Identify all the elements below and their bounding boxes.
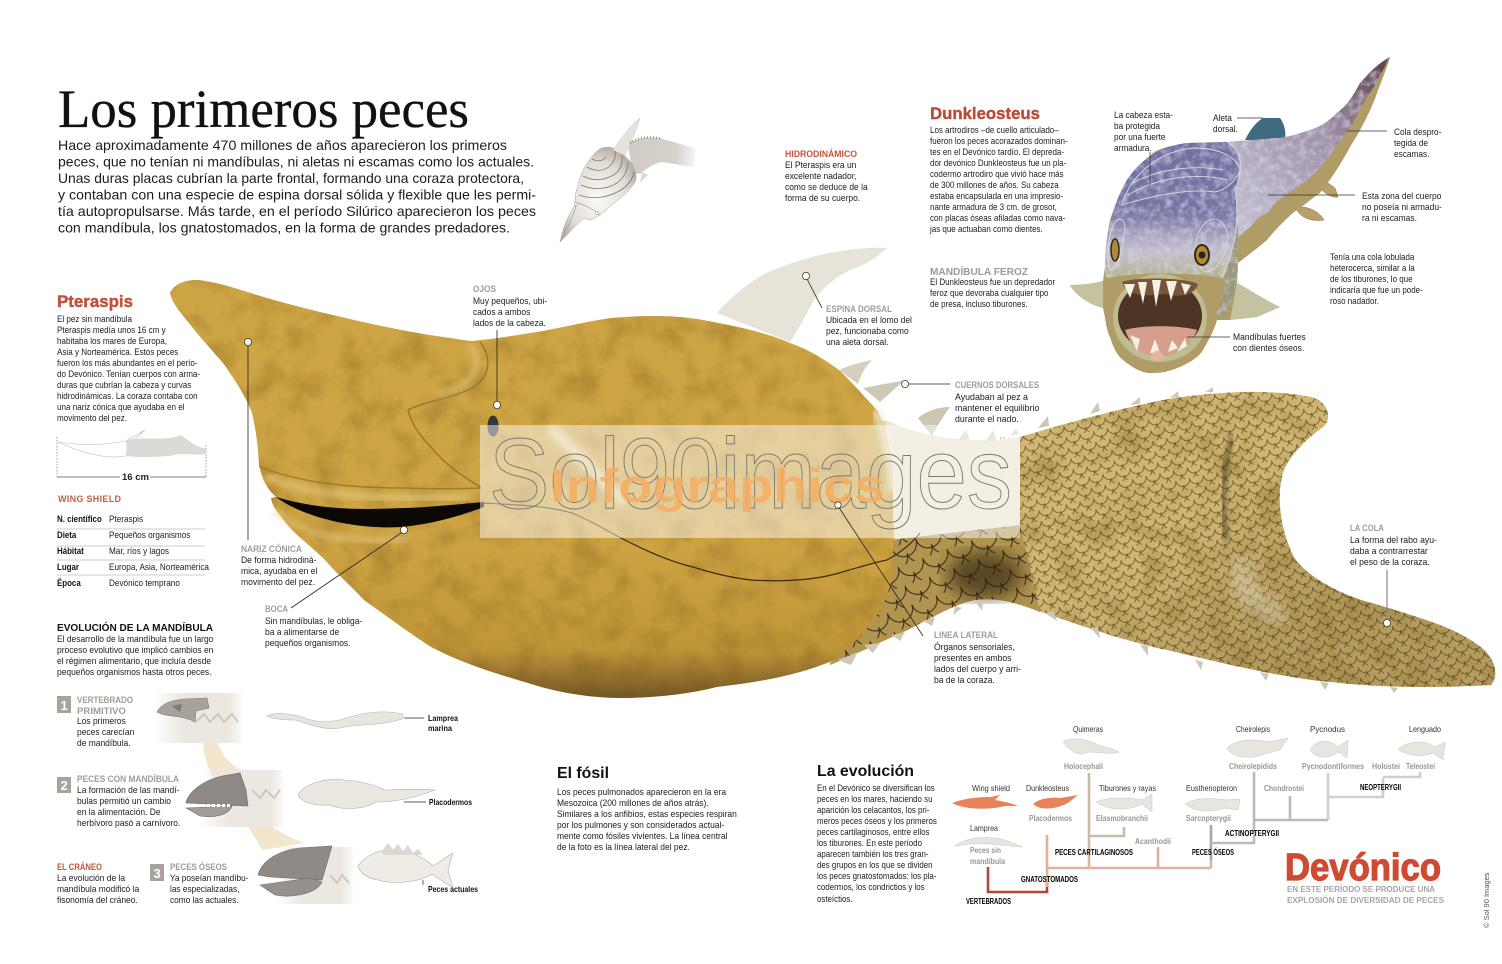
- annotations: Dunkleosteus: Cola despro-: [1394, 127, 1441, 137]
- fish silhouettes: [955, 738, 1445, 847]
- panel: evolución de la mandíbula: [57, 621, 478, 905]
- clade names: Cheirolepidids: [1229, 761, 1277, 771]
- panel: el fósil: El fósil: [557, 765, 609, 782]
- callout: la cola: daba a contrarrestar: [1350, 546, 1428, 556]
- panel: la evolución: los tiburones. En este período: [817, 837, 922, 848]
- species names: Eusthenopteron: [1186, 783, 1237, 793]
- panel: la evolución: En el Devónico se diversifican los: [817, 782, 935, 793]
- species names: Quimeras: [1073, 724, 1103, 734]
- title: Los primeros peces: [58, 79, 469, 139]
- callout: línea lateral: presentes en ambos: [934, 653, 1012, 663]
- callout: la cola: el peso de la coraza.: [1350, 557, 1430, 567]
- panel: Dunkleosteus text: estaba encapsulada en una impresio-: [930, 190, 1063, 201]
- edge spines: [838, 387, 1398, 693]
- group names: PECES ÓSEOS: [1192, 848, 1234, 857]
- cheek plate: [1207, 218, 1238, 318]
- callout: nariz cónica: movimento del pez.: [241, 577, 315, 587]
- annotations: Dunkleosteus: [1114, 110, 1442, 353]
- callout: hidrodinámico: El Pteraspis era un: [785, 160, 856, 170]
- Dunkleosteus leader lines: [1150, 118, 1387, 337]
- panel: Dunkleosteus text: de presa, incluso tiburones.: [930, 298, 1028, 309]
- back skin: [1222, 57, 1390, 260]
- callout: cuernos dorsales: durante el nado.: [955, 414, 1019, 424]
- callout: nariz cónica: NARIZ CÓNICA: [241, 543, 302, 554]
- lamprea: Lamprea: [428, 714, 458, 723]
- panel: la evolución: peces cartilaginosos, entre ellos: [817, 826, 929, 837]
- panel: Dunkleosteus text: con placas óseas afiladas como nava-: [930, 212, 1065, 223]
- panel: Dunkleosteus text: Los artrodiros –de cuello articulado–: [930, 124, 1059, 135]
- mouth: [1113, 274, 1207, 362]
- annotations: Dunkleosteus: ba protegida: [1114, 121, 1160, 131]
- species names: Lamprea: [970, 823, 998, 833]
- Devónico label: Devónico: [1285, 847, 1441, 889]
- clade names: Holostei: [1372, 761, 1400, 771]
- description: do Devónico. Tenían cuerpos con arma-: [57, 368, 200, 379]
- step 1: de mandíbula.: [77, 738, 131, 748]
- annotations: Dunkleosteus: tegida de: [1394, 138, 1428, 148]
- callout: espina dorsal: ESPINA DORSAL: [826, 304, 892, 314]
- description: fueron los más abundantes en el perío-: [57, 357, 198, 368]
- wing shield table: Pteraspis: [109, 514, 144, 524]
- wing shield table: Época: [57, 577, 81, 588]
- step 1: peces carecían: [77, 727, 134, 737]
- panel: Dunkleosteus text: feroz que devoraba cualquier tipo: [930, 287, 1049, 298]
- panel: Dunkleosteus text: codermo artrodiro que vivió hace más: [930, 168, 1064, 179]
- el cráneo: fisonomía del cráneo.: [57, 895, 138, 905]
- panel: la evolución: [817, 763, 937, 904]
- callout: boca: BOCA: [265, 604, 288, 614]
- description: habitaba los mares de Europa,: [57, 335, 167, 346]
- annotations: Dunkleosteus: con dientes óseos.: [1233, 343, 1304, 353]
- tree branches: [988, 772, 1420, 892]
- watermark: Sol90images: [489, 418, 1012, 530]
- panel: la evolución: La evolución: [817, 763, 914, 780]
- Devónico label: EN ESTE PERÍODO SE PRODUCE UNA: [1287, 884, 1435, 894]
- callout: la cola: [1350, 523, 1437, 567]
- panel: Dunkleosteus text: jas que actuaban como dientes.: [929, 223, 1043, 234]
- callout: espina dorsal: [826, 304, 912, 347]
- panel: el fósil: por los pulmones y son considerados actual-: [557, 820, 724, 830]
- illustration: small Pteraspis: [560, 118, 695, 242]
- panel: el fósil: Mesozoica (200 millones de años atrás).: [557, 798, 709, 808]
- step 3: Ya poseían mandíbu-: [170, 873, 249, 883]
- annotations: Dunkleosteus: de los tiburones, lo que: [1330, 273, 1413, 284]
- annotations: Dunkleosteus: Mandíbulas fuertes: [1233, 332, 1306, 342]
- dorsal fin: [1245, 118, 1285, 140]
- step 2: La formación de las mandí-: [77, 785, 179, 795]
- el cráneo: mandíbula modificó la: [57, 884, 139, 894]
- callout: boca: pequeños organismos.: [265, 638, 350, 648]
- eye: [488, 416, 498, 436]
- dorsal spine: [717, 248, 950, 436]
- panel: la evolución: aparecen también los tres gran-: [817, 848, 929, 859]
- panel: Pteraspis facts: [57, 292, 209, 588]
- wing shield table: [57, 494, 209, 588]
- callout: boca: Sin mandíbulas, le obliga-: [265, 616, 362, 626]
- species names: Lenguado: [1409, 724, 1441, 734]
- step 2: PECES CON MANDÍBULA: [77, 773, 179, 784]
- callout: espina dorsal: una aleta dorsal.: [826, 337, 888, 347]
- clade names: Teleostei: [1406, 761, 1435, 771]
- watermark: Infographics: [550, 459, 885, 512]
- intro: el régimen alimentario, que incluía desde: [57, 656, 211, 666]
- panel: la evolución: des grupos en los que se dividen: [817, 859, 933, 870]
- placodermos fish: Placodermos: [429, 798, 472, 807]
- wing shield table: Mar, ríos y lagos: [109, 546, 170, 556]
- intro text block: Hace aproximadamente 470 millones de años aparecieron los primeros: [58, 137, 507, 153]
- panel: Dunkleosteus text: de 300 millones de años. Su cabeza: [930, 179, 1059, 190]
- panel: Dunkleosteus text: MANDÍBULA FEROZ: [930, 265, 1029, 278]
- wing shield table: Europa, Asia, Norteamérica: [109, 562, 209, 572]
- clade names: Acanthodii: [1135, 836, 1171, 846]
- credit: © Sol 90 Images: [1482, 872, 1491, 928]
- panel: Dunkleosteus text: El Dunkleosteus fue un depredador: [930, 276, 1055, 287]
- el cráneo: La evolución de la: [57, 873, 125, 883]
- species names: Tiburones y rayas: [1099, 783, 1156, 793]
- step 3: como las actuales.: [170, 895, 239, 905]
- intro text block: tía autopropulsarse. Más tarde, en el período Silúrico aparecieron los peces: [58, 203, 536, 219]
- callout: línea lateral: Órganos sensoriales,: [934, 642, 1015, 652]
- step 3: PECES ÓSEOS: [170, 861, 227, 872]
- callout: la cola: LA COLA: [1350, 523, 1384, 533]
- intro text block: Unas duras placas cubrían la parte frontal, formando una coraza protectora,: [58, 170, 524, 186]
- step 1: VERTEBRADO: [77, 695, 133, 705]
- panel: el fósil: mente como fósiles vivientes. La línea central: [557, 831, 727, 841]
- description: duras que cubrían la cabeza y curvas: [57, 379, 192, 390]
- description: hidrodinámicas. La coraza contaba con: [57, 390, 198, 401]
- callout: hidrodinámico: excelente nadador,: [785, 171, 856, 181]
- panel: main Pteraspis illustration: [170, 248, 1495, 698]
- description: movimento del pez.: [57, 412, 127, 423]
- step 3: las especializadas,: [170, 884, 239, 894]
- wing shield table: Devónico temprano: [109, 578, 180, 588]
- callout lines and dots: [244, 272, 1391, 636]
- carapace: [170, 280, 893, 698]
- callout: espina dorsal: Ubicada en el lomo del: [826, 315, 912, 325]
- wing shield table: Lugar: [57, 561, 80, 572]
- species names: Pycnodus: [1310, 724, 1345, 734]
- callout: nariz cónica: De forma hidrodiná-: [241, 555, 317, 565]
- panel: la evolución: aparición los celacantos, los pri-: [817, 804, 930, 815]
- description: [57, 313, 200, 423]
- panel: Dunkleosteus text: tes en el Devónico tardío. El depreda-: [930, 146, 1064, 157]
- panel: el fósil: [557, 765, 737, 852]
- Devónico label: [1285, 847, 1444, 905]
- wing shield table: Dieta: [57, 529, 77, 540]
- size diagram: 16 cm: [122, 472, 149, 483]
- callout: línea lateral: [934, 630, 1021, 685]
- group names: GNATOSTOMADOS: [1021, 875, 1079, 884]
- panel: Dunkleosteus text: nante armadura de 3 cm. de grosor,: [930, 201, 1057, 212]
- callout: ojos: lados de la cabeza.: [473, 318, 546, 328]
- panel: la evolución: los peces gnatostomados: los pla-: [817, 870, 937, 881]
- clade names: Elasmobranchii: [1096, 813, 1148, 823]
- illustration: Dunkleosteus: [1070, 57, 1390, 373]
- annotations: Dunkleosteus: no poseía ni armadu-: [1362, 202, 1442, 212]
- group names: NEOPTERYGII: [1360, 783, 1401, 792]
- el cráneo: [57, 861, 139, 905]
- callout: hidrodinámico: forma de su cuerpo.: [785, 193, 860, 203]
- panel: el fósil: de la foto es la línea lateral del pez.: [557, 842, 690, 852]
- lamprea: [267, 712, 458, 733]
- intro text block: con mandíbula, los gnatostomados, en la forma de grandes predadores.: [58, 220, 510, 236]
- callout: cuernos dorsales: Ayudaban al pez a: [955, 392, 1029, 402]
- lamprea: marina: [428, 724, 452, 733]
- panel: la evolución: osteíctios.: [817, 893, 853, 904]
- intro text block: peces, que no tenían ni mandíbulas, ni aletas ni escamas como los actuales.: [58, 154, 534, 170]
- annotations: Dunkleosteus: Tenía una cola lobulada: [1330, 251, 1414, 262]
- step 1: Los primeros: [77, 716, 126, 726]
- annotations: Dunkleosteus: heterocerca, similar a la: [1330, 262, 1415, 273]
- body outline: [1070, 57, 1390, 373]
- panel: Dunkleosteus text: Dunkleosteus: [930, 104, 1040, 123]
- annotations: Dunkleosteus: ra ni escamas.: [1362, 213, 1417, 223]
- clade names: Peces sin: [970, 845, 1001, 855]
- step 2: herbívoro pasó a carnívoro.: [77, 818, 180, 828]
- Devónico label: EXPLOSIÓN DE DIVERSIDAD DE PECES: [1287, 894, 1444, 905]
- head armour: [1105, 142, 1240, 278]
- heading: Pteraspis: [57, 292, 133, 311]
- annotations: Dunkleosteus: La cabeza esta-: [1114, 110, 1173, 120]
- wing shield table: Pequeños organismos: [109, 530, 191, 540]
- callout: línea lateral: ba de la coraza.: [934, 675, 995, 685]
- callout: hidrodinámico: como se deduce de la: [785, 182, 868, 192]
- clade names: Holocephali: [1064, 761, 1103, 771]
- description: una nariz cónica que ayudaba en el: [57, 401, 185, 412]
- placodermos fish: [298, 780, 472, 808]
- annotations: Dunkleosteus: Esta zona del cuerpo: [1362, 191, 1441, 201]
- species names: Cheirolepis: [1236, 724, 1270, 734]
- description: Pteraspis medía unos 16 cm y: [57, 324, 166, 335]
- annotations: Dunkleosteus: escamas.: [1394, 149, 1429, 159]
- orange highlighted fish: [952, 795, 1078, 809]
- panel: Dunkleosteus text: dor devónico Dunkleosteus fue un pla-: [930, 157, 1066, 168]
- panel: la evolución: peces en los mares, haciendo su: [817, 793, 933, 804]
- callout: hidrodinámico: [785, 148, 868, 203]
- heading: EVOLUCIÓN DE LA MANDÍBULA: [57, 621, 213, 634]
- callout: cuernos dorsales: [955, 380, 1039, 424]
- chart: evolutionary tree: [952, 724, 1445, 906]
- peces actuales fish: Peces actuales: [428, 885, 478, 894]
- arrow band: [203, 743, 305, 850]
- panel: Dunkleosteus text: fueron los peces acorazados dominan-: [930, 135, 1068, 146]
- skull 3: [258, 846, 353, 904]
- step 1: 1: [60, 698, 68, 713]
- step 2: 2: [60, 778, 68, 793]
- intro: El desarrollo de la mandíbula fue un largo: [57, 634, 213, 644]
- clade names: Chondrostei: [1264, 783, 1304, 793]
- intro: pequeños organismos hasta otros peces.: [57, 667, 212, 677]
- callout: nariz cónica: mica, ayudaba en el: [241, 566, 317, 576]
- wing shield table: WING SHIELD: [58, 494, 121, 504]
- intro: proceso evolutivo que implicó cambios en: [57, 645, 213, 655]
- step 2: bulas permitió un cambio: [77, 796, 171, 806]
- description: El pez sin mandíbula: [57, 313, 132, 324]
- callout: boca: [265, 604, 362, 648]
- species names: Dunkleosteus: [1026, 783, 1069, 793]
- panel: Dunkleosteus text: [929, 104, 1068, 309]
- step 3: 3: [154, 866, 161, 881]
- clade names: Sarcopterygii: [1186, 813, 1231, 823]
- callout: ojos: OJOS: [473, 284, 496, 294]
- wing shield table: N. científico: [57, 513, 102, 524]
- annotations: Dunkleosteus: Aleta: [1213, 113, 1232, 123]
- step 1: PRIMITIVO: [77, 706, 126, 716]
- carapace plate seams and lips: [259, 342, 920, 581]
- clade names: Pycnodontiformes: [1302, 761, 1364, 771]
- callout: línea lateral: LINEA LATERAL: [934, 630, 998, 640]
- callout: ojos: cados a ambos: [473, 307, 531, 317]
- mouth: [276, 497, 484, 527]
- peces actuales fish: [358, 843, 478, 894]
- intro text block: y contaban con una especie de espina dorsal sólida y flexible que les permi-: [58, 186, 536, 202]
- annotations: Dunkleosteus: dorsal.: [1213, 124, 1238, 134]
- clade names: mandíbula: [970, 856, 1005, 866]
- armour plates: [1108, 142, 1240, 278]
- skull 1: [153, 693, 242, 743]
- panel: el fósil: Los peces pulmonados aparecieron en la era: [557, 787, 726, 797]
- pectoral fin highlights: [1070, 281, 1280, 320]
- clade names: [970, 761, 1435, 866]
- annotations: Dunkleosteus: roso nadador.: [1330, 295, 1379, 306]
- el cráneo: EL CRÁNEO: [57, 861, 102, 872]
- callout: espina dorsal: pez, funcionaba como: [826, 326, 909, 336]
- eyes: [1111, 239, 1209, 265]
- size diagram: [57, 430, 206, 483]
- callout: nariz cónica: [241, 543, 317, 587]
- scaled body and tail: [800, 387, 1495, 693]
- callout: línea lateral: lados del cuerpo y arri-: [934, 664, 1021, 674]
- step 2: [57, 773, 180, 828]
- group names: VERTEBRADOS: [966, 897, 1011, 906]
- step 1: [57, 695, 134, 748]
- pelvic fins: [1296, 183, 1338, 220]
- callout: hidrodinámico: HIDRODINÁMICO: [785, 148, 857, 159]
- group names: ACTINOPTERYGII: [1225, 829, 1279, 838]
- panel: el fósil: Similares a los anfibios, estas especies respiran: [557, 809, 737, 819]
- annotations: Dunkleosteus: por una fuerte: [1114, 132, 1166, 142]
- panel: la evolución: meros peces óseos y los primeros: [817, 815, 937, 826]
- species names: [970, 724, 1441, 833]
- intro: [57, 634, 213, 677]
- callout: ojos: [473, 284, 547, 328]
- wing shield table: Hábitat: [57, 545, 84, 556]
- callout: boca: ba a alimentarse de: [265, 627, 339, 637]
- panel: la evolución: codermos, los condrictios y los: [817, 881, 925, 892]
- description: Asia y Norteamérica. Estos peces: [57, 346, 179, 357]
- group names: PECES CARTILAGINOSOS: [1055, 848, 1134, 857]
- callout: cuernos dorsales: CUERNOS DORSALES: [955, 380, 1039, 390]
- callout: cuernos dorsales: mantener el equilibrio: [955, 403, 1039, 413]
- group names: [966, 783, 1401, 906]
- step 2: en la alimentación. De: [77, 807, 161, 817]
- clade names: Placodermos: [1029, 813, 1072, 823]
- annotations: Dunkleosteus: indicaría que fue un pode-: [1330, 284, 1423, 295]
- step 3: [150, 861, 249, 905]
- callout: ojos: Muy pequeños, ubi-: [473, 296, 547, 306]
- skull 2: [186, 770, 283, 827]
- species names: Wing shield: [972, 783, 1010, 793]
- callout: la cola: La forma del rabo ayu-: [1350, 535, 1437, 545]
- annotations: Dunkleosteus: armadura.: [1114, 143, 1152, 153]
